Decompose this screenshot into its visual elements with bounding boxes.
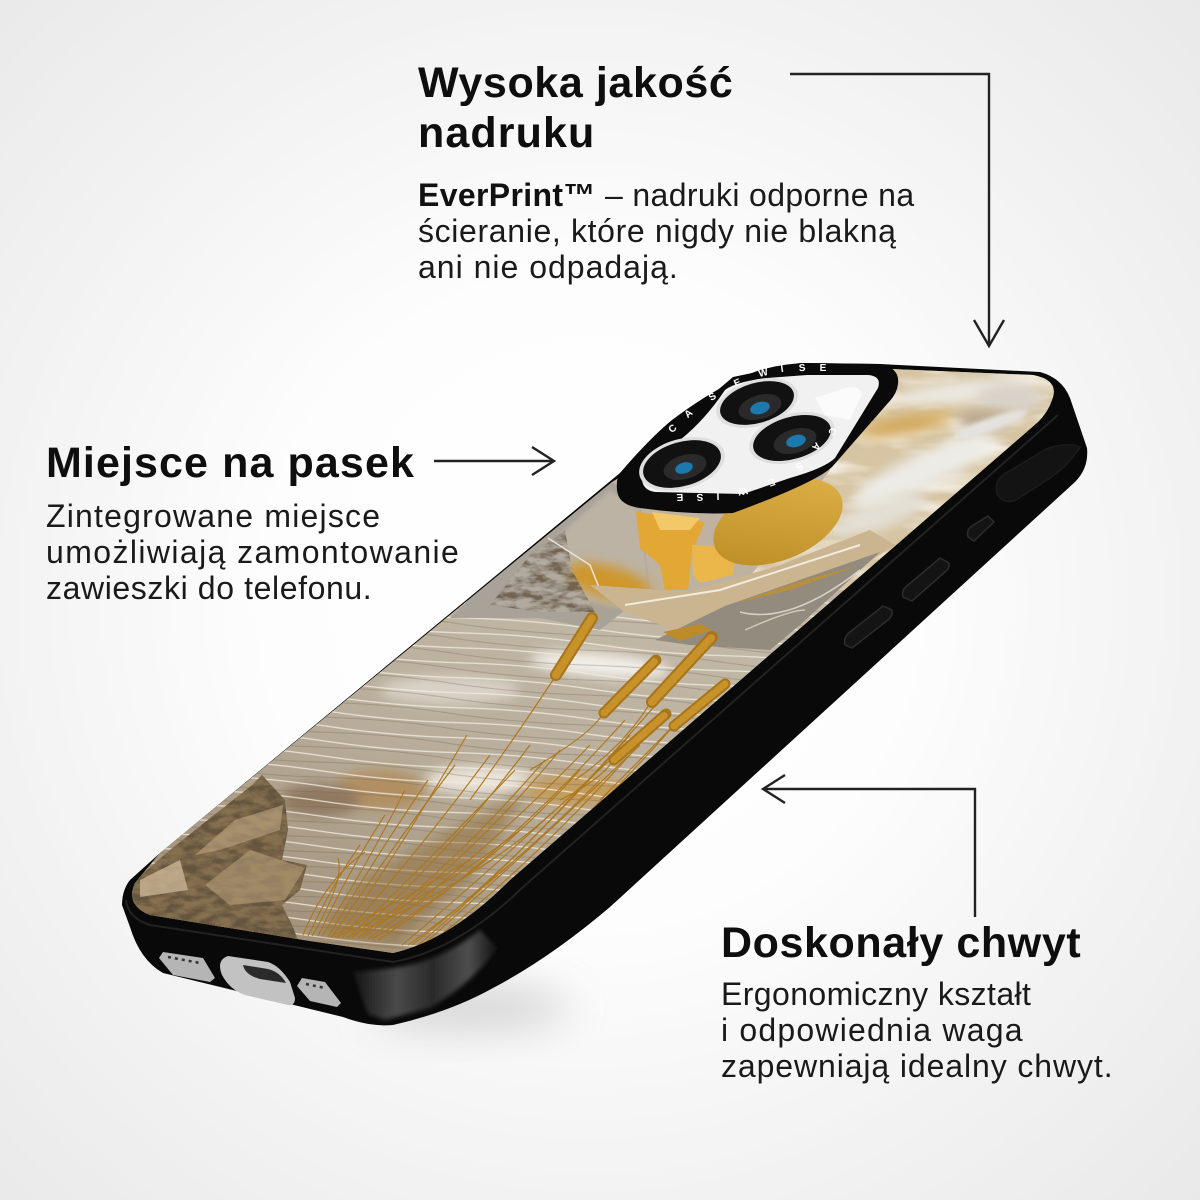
lenses bbox=[633, 369, 841, 500]
text: print quality: EverPrint™ – nadruki odporne na bbox=[418, 177, 914, 213]
case artwork bbox=[120, 360, 1070, 970]
text: grip bbox=[721, 976, 1113, 1084]
text: print quality: ścieranie, które nigdy nie blakną bbox=[418, 213, 897, 249]
pale band below sun bbox=[590, 530, 895, 632]
rim bevel bbox=[126, 415, 1058, 962]
heading: strap: Miejsce na pasek bbox=[46, 439, 415, 487]
brand lettering: I bbox=[780, 364, 785, 375]
brand lettering: S bbox=[696, 491, 703, 502]
callout: grip bbox=[721, 919, 1113, 1084]
text: grip: Ergonomiczny kształt bbox=[721, 976, 1031, 1012]
heading: print quality: nadruku bbox=[418, 109, 595, 157]
brand lettering: A bbox=[809, 440, 822, 452]
silver stone left bbox=[450, 482, 650, 630]
brand lettering bbox=[667, 363, 838, 502]
rock pile bbox=[120, 775, 307, 945]
usb port bbox=[220, 956, 295, 1005]
brand lettering: E bbox=[766, 475, 777, 488]
brand lettering: S bbox=[707, 391, 719, 404]
brand lettering: S bbox=[793, 459, 805, 472]
text: strap: umożliwiają zamontowanie bbox=[46, 534, 460, 570]
text: strap bbox=[46, 498, 460, 606]
left speaker grille bbox=[159, 952, 215, 982]
grass blades bbox=[303, 677, 672, 945]
sun bbox=[713, 479, 843, 566]
callout: print quality bbox=[418, 59, 914, 285]
brand lettering: W bbox=[737, 484, 748, 497]
heading: print quality: Wysoka jakość bbox=[418, 59, 733, 107]
text: grip: i odpowiednia waga bbox=[721, 1012, 1024, 1048]
phone case illustration bbox=[122, 363, 1088, 1044]
brand lettering: W bbox=[757, 367, 770, 380]
text: grip: zapewniają idealny chwyt. bbox=[721, 1048, 1113, 1084]
case body bbox=[122, 363, 1087, 1025]
brand lettering: C bbox=[667, 423, 679, 436]
upper marble clouds bbox=[740, 362, 1060, 590]
text: strap: zawieszki do telefonu. bbox=[46, 570, 372, 606]
brand lettering: E bbox=[820, 363, 827, 374]
brand lettering: I bbox=[716, 490, 720, 501]
bottom ports bbox=[159, 952, 341, 1007]
brand lettering: C bbox=[825, 425, 838, 437]
grass shadow mass bbox=[315, 790, 530, 945]
drop shadow bbox=[370, 984, 570, 1032]
wheat heads bbox=[556, 618, 725, 760]
brand lettering: E bbox=[676, 491, 683, 502]
side buttons bbox=[845, 445, 1080, 648]
brand lettering: S bbox=[798, 363, 806, 374]
text: print quality bbox=[418, 177, 914, 285]
text: print quality: ani nie odpadają. bbox=[418, 249, 679, 285]
gold rock shapes bbox=[636, 512, 705, 590]
right speaker grille bbox=[297, 978, 341, 1007]
brand lettering: A bbox=[683, 408, 695, 421]
water ribbed area bbox=[132, 600, 833, 953]
camera module bbox=[617, 363, 898, 513]
gray mountain band bbox=[655, 552, 880, 650]
art base bbox=[120, 360, 1070, 960]
glossy corner bbox=[353, 930, 498, 1020]
callout: strap bbox=[46, 439, 460, 606]
text: strap: Zintegrowane miejsce bbox=[46, 498, 381, 534]
brand lettering: E bbox=[732, 377, 743, 390]
heading: grip: Doskonały chwyt bbox=[721, 919, 1081, 967]
heading: print quality bbox=[418, 59, 733, 157]
lens opening bbox=[642, 375, 879, 494]
